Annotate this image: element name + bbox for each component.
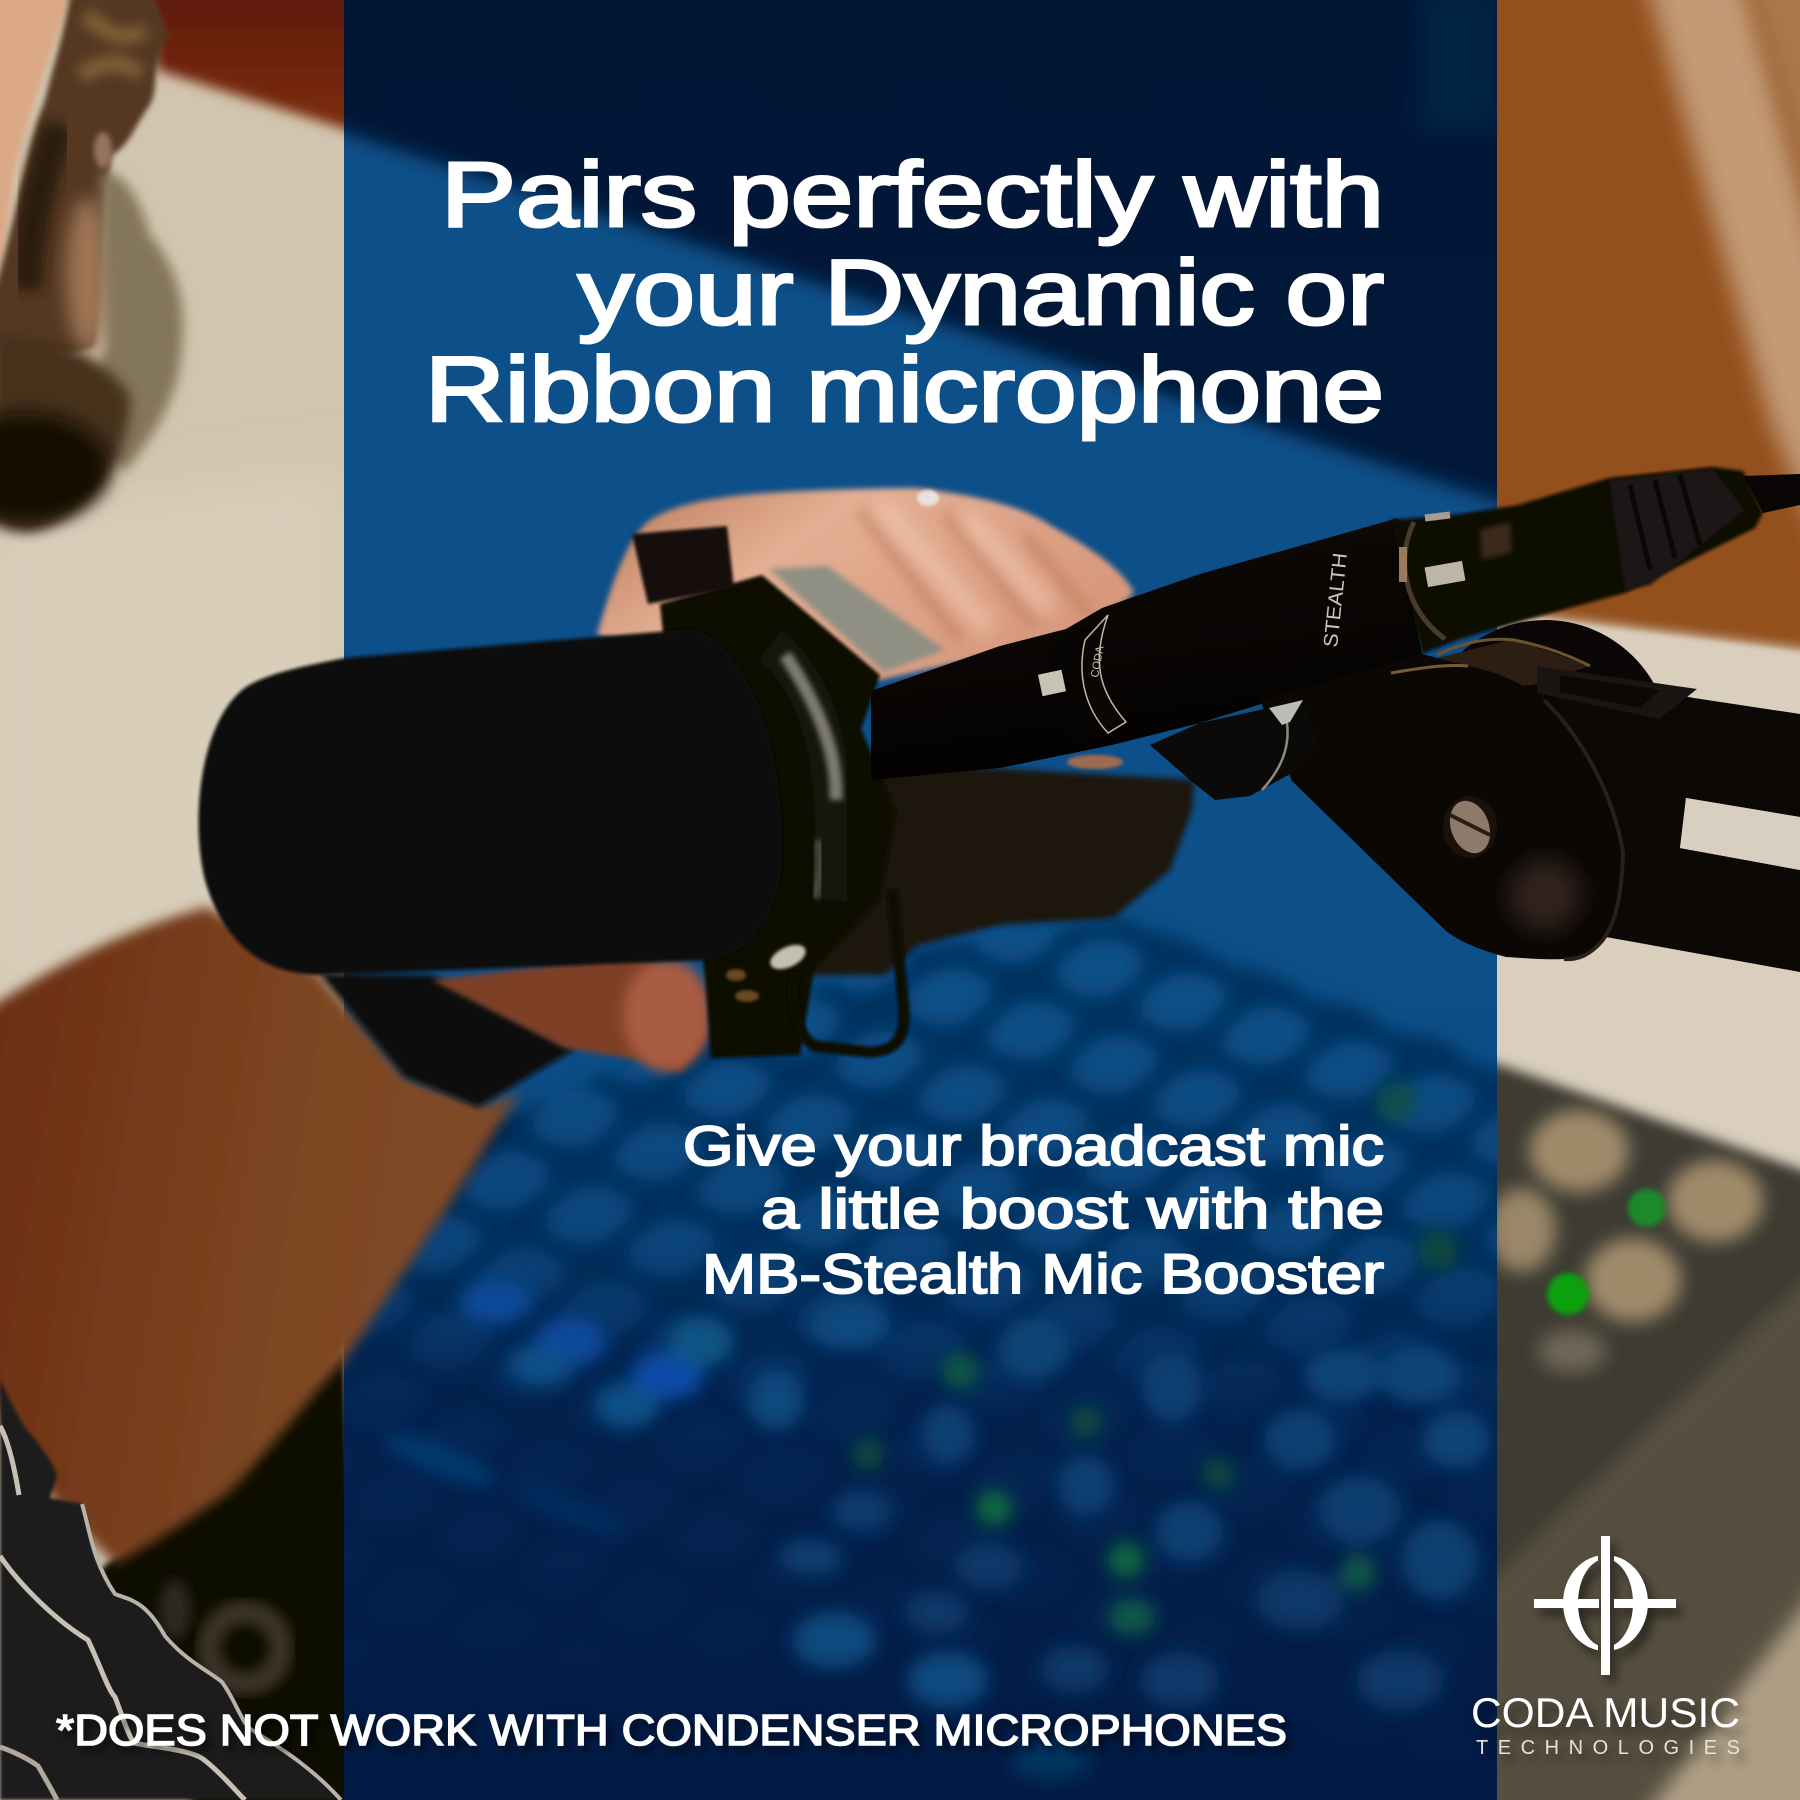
upper and lower arm xyxy=(1560,672,1800,972)
tan corner xyxy=(1633,1570,1800,1800)
boom arm xyxy=(1420,620,1800,972)
foam windscreen xyxy=(199,629,782,975)
blurred knob xyxy=(159,1580,281,1684)
background photo: right side xyxy=(1480,0,1800,1800)
headline: your Dynamic or xyxy=(578,242,1384,344)
orange wall xyxy=(1480,0,1800,654)
rubber boot xyxy=(1609,469,1745,590)
small adjustment knob xyxy=(1150,700,1319,800)
shirt with stripes xyxy=(0,1380,341,1800)
logo mark xyxy=(1534,1536,1676,1675)
mixer knobs xyxy=(1488,1110,1763,1373)
headline: Pairs perfectly with xyxy=(441,144,1384,246)
background photo: left side xyxy=(0,0,380,1800)
rear disc xyxy=(1420,620,1670,870)
footnote: *DOES NOT WORK WITH CONDENSER MICROPHONES xyxy=(56,1706,1287,1755)
CODA badge xyxy=(1082,615,1126,733)
panel: blue tinted centre column xyxy=(320,0,1520,1800)
wire loop xyxy=(793,890,904,1052)
logo: Coda Music Technologies xyxy=(1471,1536,1740,1759)
booster tube xyxy=(871,518,1422,780)
mixer glowing pads and knobs xyxy=(379,1082,1491,1780)
tan streak xyxy=(1640,0,1800,590)
subheading xyxy=(683,1114,1384,1305)
bronze plate xyxy=(1437,639,1590,690)
headline xyxy=(425,144,1384,441)
finger tip under tube xyxy=(1067,755,1123,769)
forearm and wristband xyxy=(0,907,575,1564)
lower mixer face xyxy=(1480,1255,1800,1800)
screw xyxy=(1443,796,1497,858)
connector barrel xyxy=(1391,467,1763,654)
XLR connector and cable xyxy=(1391,467,1800,654)
grey tablet behind fingers xyxy=(769,566,945,672)
cream lower edge of orange xyxy=(1480,620,1800,1180)
shock mount ring and cradle xyxy=(632,526,904,1058)
red wall xyxy=(140,0,380,140)
subheading: MB-Stealth Mic Booster xyxy=(702,1242,1384,1305)
grille teeth xyxy=(1038,670,1066,696)
thumb under mic xyxy=(432,955,711,1072)
grille xyxy=(1425,561,1465,587)
black gear behind arm xyxy=(100,1350,360,1800)
pivot disc with screw xyxy=(1260,654,1623,959)
mixer with pads xyxy=(330,918,1510,1800)
cable xyxy=(1743,474,1800,513)
headline: Ribbon microphone xyxy=(425,339,1384,441)
mixer body xyxy=(1480,1058,1800,1800)
wristband xyxy=(319,973,575,1107)
mic body rear xyxy=(760,760,1194,975)
metal collar xyxy=(1405,522,1445,639)
logo wordmark: CODA MUSIC xyxy=(1471,1689,1740,1736)
logo tagline: TECHNOLOGIES xyxy=(1476,1737,1740,1759)
mixer darkening toward the bottom xyxy=(330,1000,1510,1800)
subheading: a little boost with the xyxy=(761,1177,1384,1240)
top corner brown xyxy=(1740,0,1800,300)
panel lighting: bright blue wall xyxy=(320,125,1520,1120)
bracket xyxy=(1537,666,1697,719)
window through arm xyxy=(1680,798,1800,870)
forearm xyxy=(0,907,520,1564)
panel glow: teal at top right xyxy=(1420,0,1500,130)
mount knob xyxy=(632,526,734,604)
top hand gripping the mic xyxy=(597,488,1134,680)
connector highlight xyxy=(1480,522,1512,560)
cream wall xyxy=(0,470,344,1020)
STEALTH label: STEALTH xyxy=(1320,552,1352,649)
CODA badge: CODA xyxy=(1089,644,1107,679)
face and beard xyxy=(0,0,183,532)
subheading: Give your broadcast mic xyxy=(683,1114,1384,1177)
